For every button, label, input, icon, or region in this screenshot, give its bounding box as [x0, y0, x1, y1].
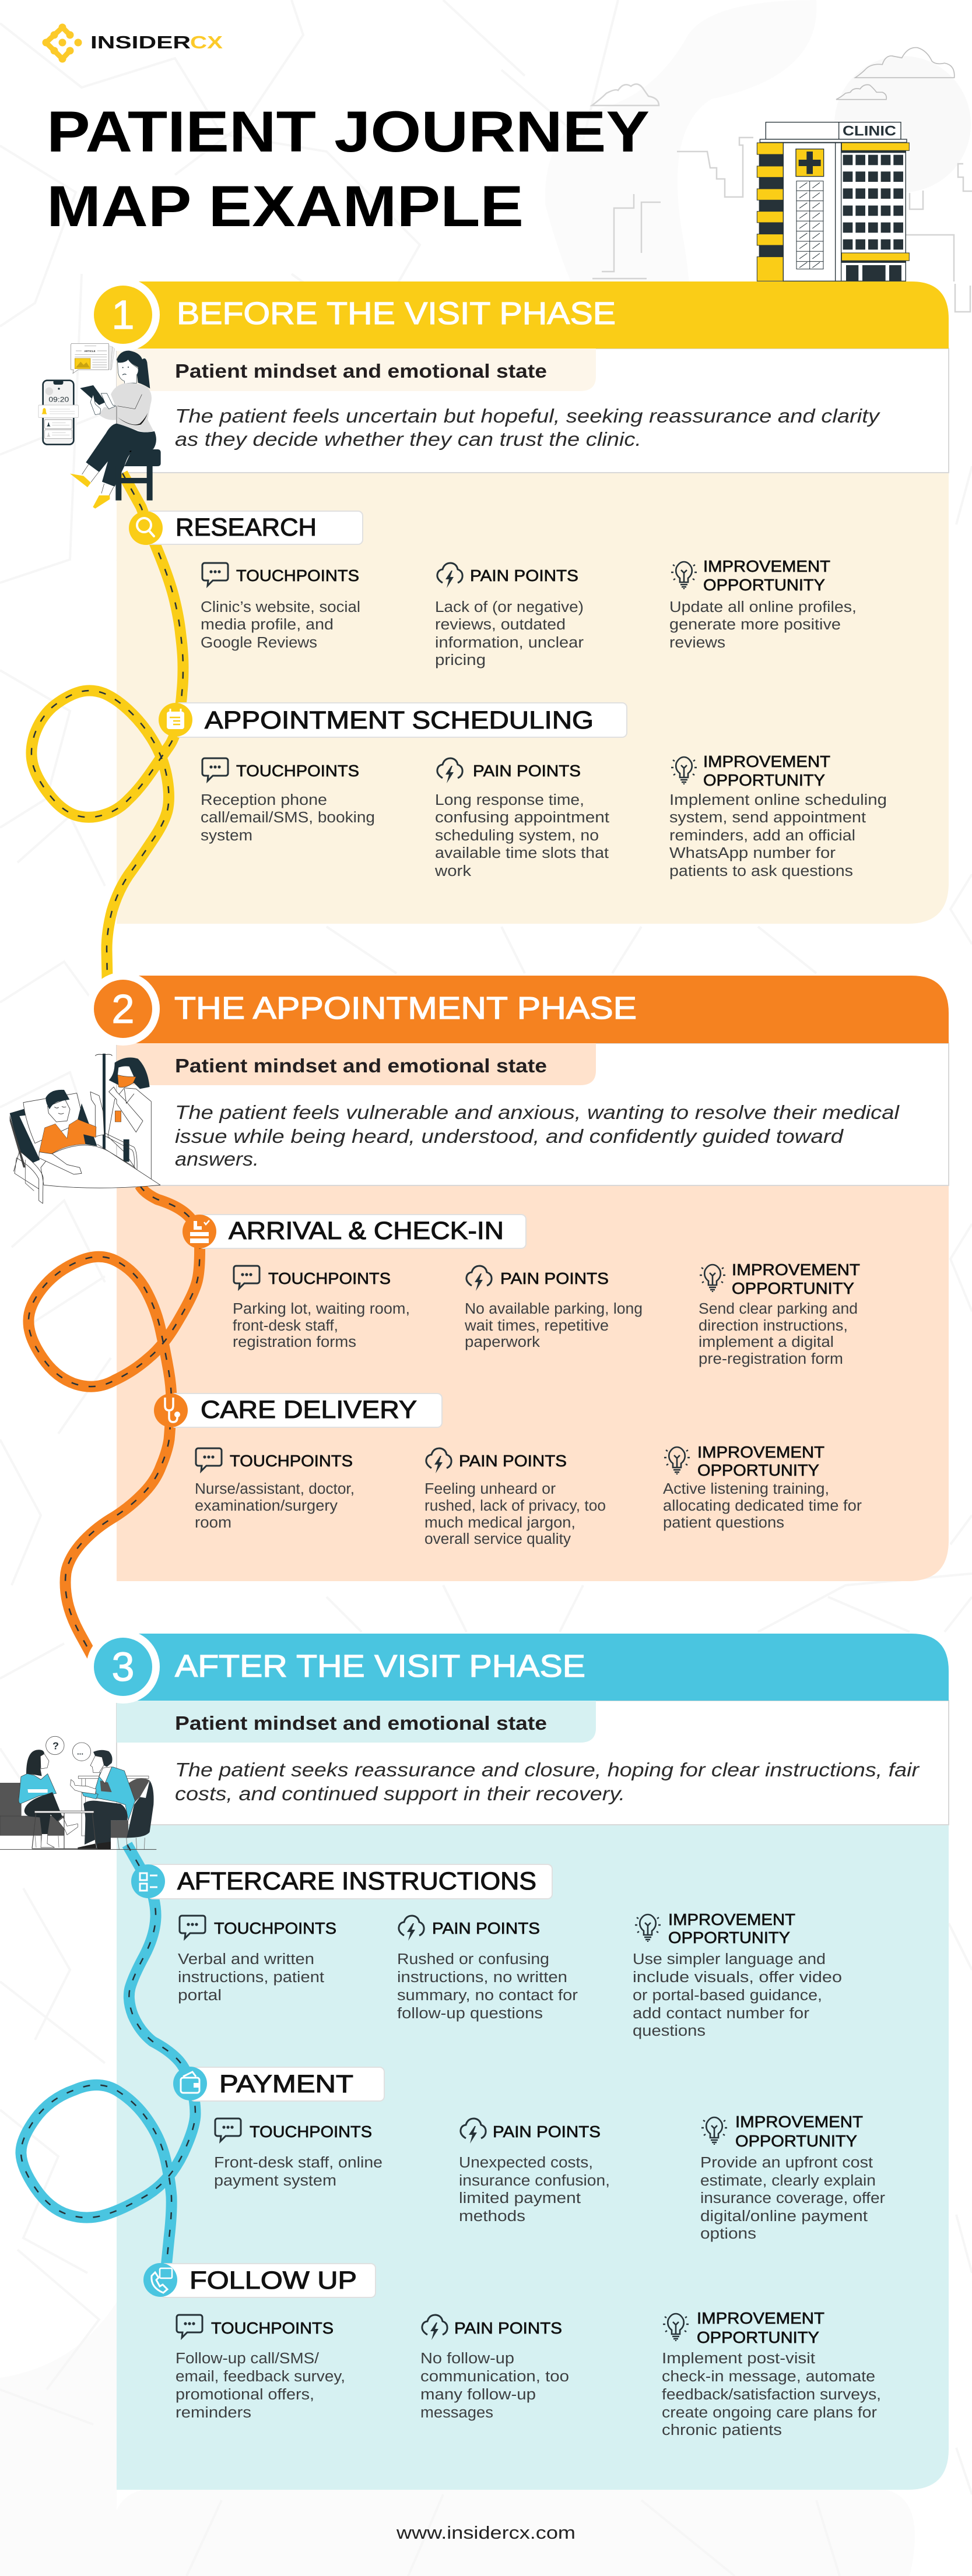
improvement opportunity: reviews [669, 635, 725, 651]
pain points: work [434, 863, 471, 879]
touchpoints: Google Reviews [201, 635, 317, 651]
mindset box [117, 1701, 949, 1825]
touchpoints: Parking lot, waiting room, [233, 1301, 410, 1317]
improvement opportunity: generate more positive [669, 617, 841, 633]
pain points: confusing appointment [435, 810, 609, 826]
step: aftercare instructions [131, 1864, 552, 1899]
touchpoints [201, 563, 360, 651]
phase title: AFTER THE VISIT PHASE [175, 1649, 585, 1684]
illustration: woman with tablet, phone and article: 09:20 [48, 396, 69, 403]
pain points: Feeling unheard or [424, 1481, 556, 1497]
mindset text [175, 1759, 920, 1804]
pain points: communication, too [420, 2369, 569, 2385]
improvement opportunity: IMPROVEMENT [697, 1443, 824, 1461]
phase title: THE APPOINTMENT PHASE [174, 991, 637, 1026]
logo [42, 23, 223, 63]
phase header [123, 281, 949, 349]
improvement opportunity: IMPROVEMENT [732, 1261, 860, 1279]
touchpoints: payment system [214, 2173, 336, 2189]
mindset text: The patient seeks reassurance and closure, hoping for clear instructions, fair [175, 1759, 920, 1780]
improvement opportunity: Active listening training, [663, 1481, 829, 1497]
step: arrival and check-in [183, 1215, 526, 1248]
pain points: rushed, lack of privacy, too [424, 1498, 606, 1514]
arrival columns [233, 1261, 860, 1367]
panel: after the visit phase [0, 1630, 949, 2490]
improvement opportunity: create ongoing care plans for [662, 2405, 878, 2421]
improvement opportunity: check-in message, automate [662, 2369, 875, 2385]
panel: the appointment phase [10, 972, 949, 1658]
mindset heading: Patient mindset and emotional state [175, 1055, 547, 1076]
improvement opportunity: patients to ask questions [669, 863, 853, 879]
improvement opportunity: pre-registration form [699, 1351, 843, 1367]
touchpoints: TOUCHPOINTS [236, 566, 359, 585]
title [47, 99, 650, 238]
improvement opportunity: direction instructions, [699, 1318, 848, 1334]
touchpoints: promotional offers, [176, 2387, 314, 2403]
improvement opportunity: OPPORTUNITY [668, 1929, 790, 1947]
pain points: available time slots that [435, 845, 609, 861]
phase header [123, 976, 949, 1043]
phase header [123, 1634, 949, 1701]
illustration: patient and doctor talking [0, 1736, 156, 1849]
improvement opportunity: IMPROVEMENT [703, 752, 830, 770]
pain points: information, unclear [435, 635, 584, 651]
improvement opportunity: implement a digital [699, 1334, 834, 1350]
touchpoints: email, feedback survey, [176, 2369, 345, 2385]
mindset text: issue while being heard, understood, and confidently guided toward [175, 1125, 844, 1147]
touchpoints: Follow-up call/SMS/ [176, 2350, 320, 2367]
pain points: reviews, outdated [435, 617, 566, 633]
improvement opportunity [700, 2113, 886, 2242]
improvement opportunity: OPPORTUNITY [697, 1461, 819, 1479]
payment columns [214, 2113, 886, 2242]
mindset text: answers. [175, 1148, 259, 1170]
touchpoints: Reception phone [201, 792, 327, 808]
touchpoints: TOUCHPOINTS [211, 2319, 334, 2337]
improvement opportunity: digital/online payment [700, 2208, 868, 2225]
footer url: www.insidercx.com [396, 2522, 576, 2543]
improvement opportunity: Update all online profiles, [669, 599, 857, 615]
illustration: woman with tablet, phone and article [38, 343, 161, 509]
panel body [117, 1825, 949, 2490]
pain points: overall service quality [424, 1531, 571, 1547]
journey road: orange [29, 1185, 200, 1658]
touchpoints: portal [178, 1987, 222, 2004]
illustration: patient and doctor talking: ... [77, 1748, 83, 1757]
pain points: No follow-up [420, 2350, 514, 2367]
improvement opportunity: patient questions [663, 1515, 784, 1531]
research columns [201, 557, 857, 668]
pain points [424, 1448, 606, 1547]
logo: CX [190, 32, 223, 52]
clinic building illustration [757, 48, 955, 281]
pain points: insurance confusion, [459, 2173, 610, 2189]
pain points: scheduling system, no [435, 828, 599, 844]
care delivery columns [195, 1443, 862, 1547]
improvement opportunity: include visuals, offer video [633, 1969, 842, 1986]
improvement opportunity: Send clear parking and [699, 1301, 858, 1317]
panel body [117, 473, 949, 924]
mindset tab [117, 1043, 596, 1085]
improvement opportunity: reminders, add an official [669, 828, 855, 844]
step: follow up [143, 2263, 376, 2297]
aftercare columns [178, 1910, 842, 2039]
pain points: follow-up questions [397, 2005, 543, 2022]
touchpoints: Front-desk staff, online [214, 2155, 383, 2171]
touchpoints: examination/surgery [195, 1498, 338, 1514]
step: care delivery [154, 1393, 442, 1427]
improvement opportunity: or portal-based guidance, [633, 1987, 822, 2004]
title: MAP EXAMPLE [47, 174, 524, 238]
touchpoints: reminders [176, 2405, 251, 2421]
step: payment [173, 2067, 384, 2101]
pain points: No available parking, long [465, 1301, 643, 1317]
improvement opportunity: insurance coverage, offer [700, 2190, 886, 2207]
pain points [420, 2315, 569, 2421]
appointment scheduling columns [201, 752, 887, 879]
logo: INSIDER [90, 32, 191, 52]
pain points: wait times, repetitive [464, 1318, 609, 1334]
improvement opportunity: OPPORTUNITY [703, 771, 825, 789]
illustration: patient and doctor talking: ? [52, 1740, 59, 1751]
illustration: patient in bed with nurse [10, 1054, 160, 1203]
mindset heading: Patient mindset and emotional state [175, 360, 547, 382]
number badge: 3 [112, 1644, 134, 1690]
pain points: Unexpected costs, [459, 2155, 593, 2171]
improvement opportunity: allocating dedicated time for [663, 1498, 862, 1514]
improvement opportunity [662, 2309, 881, 2438]
improvement opportunity [663, 1443, 862, 1531]
pain points: methods [459, 2208, 525, 2225]
skyline outlines and clouds [592, 84, 972, 312]
improvement opportunity [669, 752, 887, 879]
improvement opportunity: OPPORTUNITY [697, 2328, 819, 2346]
touchpoints: call/email/SMS, booking [201, 810, 375, 826]
pain points [434, 758, 609, 879]
phase title: BEFORE THE VISIT PHASE [177, 296, 616, 331]
illustration: woman with tablet, phone and article: ARTICLE [84, 350, 96, 353]
touchpoints: Nurse/assistant, doctor, [195, 1481, 355, 1497]
improvement opportunity [699, 1261, 860, 1367]
improvement opportunity: WhatsApp number for [669, 845, 836, 861]
pain points: limited payment [459, 2190, 581, 2207]
step: appointment scheduling [159, 703, 627, 737]
touchpoints: system [201, 828, 252, 844]
mindset tab [117, 1701, 596, 1743]
touchpoints: registration forms [233, 1334, 356, 1350]
improvement opportunity: questions [633, 2023, 706, 2039]
pain points: PAIN POINTS [454, 2319, 562, 2337]
pain points: PAIN POINTS [470, 566, 578, 585]
pain points [464, 1266, 643, 1350]
step: aftercare instructions: AFTERCARE INSTRUCTIONS [177, 1867, 536, 1895]
mindset heading: Patient mindset and emotional state [175, 1712, 547, 1734]
touchpoints [195, 1448, 355, 1531]
improvement opportunity [633, 1910, 842, 2039]
improvement opportunity: OPPORTUNITY [703, 576, 825, 594]
improvement opportunity: feedback/satisfaction surveys, [662, 2387, 881, 2403]
pain points: many follow-up [420, 2387, 536, 2403]
mindset text: as they decide whether they can trust the clinic. [175, 428, 641, 450]
pain points: Lack of (or negative) [435, 599, 584, 615]
mindset box [117, 349, 949, 473]
step: payment: PAYMENT [219, 2070, 353, 2098]
number badge: 1 [112, 292, 134, 337]
pain points: paperwork [465, 1334, 540, 1350]
improvement opportunity: OPPORTUNITY [732, 1279, 854, 1297]
pain points: summary, no contact for [397, 1987, 578, 2004]
mindset text: costs, and continued support in their recovery. [175, 1783, 625, 1804]
step: care delivery: CARE DELIVERY [201, 1396, 417, 1424]
number badge [86, 1630, 160, 1704]
touchpoints: TOUCHPOINTS [230, 1452, 353, 1470]
pain points: instructions, no written [397, 1969, 567, 1986]
touchpoints: front-desk staff, [233, 1318, 338, 1334]
step: research [129, 511, 363, 545]
pain points [459, 2118, 610, 2225]
improvement opportunity: IMPROVEMENT [703, 557, 830, 575]
step: arrival and check-in: ARRIVAL & CHECK-IN [229, 1217, 504, 1245]
follow up columns [176, 2309, 881, 2438]
mindset box [117, 1043, 949, 1185]
pain points: messages [420, 2405, 493, 2421]
touchpoints: Verbal and written [178, 1951, 314, 1968]
mindset text: The patient feels uncertain but hopeful, seeking reassurance and clarity [175, 405, 881, 427]
panel body [117, 1185, 949, 1581]
mindset text [175, 1102, 900, 1170]
touchpoints [201, 758, 375, 844]
pain points [435, 563, 584, 668]
improvement opportunity: system, send appointment [669, 810, 866, 826]
touchpoints: TOUCHPOINTS [268, 1269, 391, 1287]
step: appointment scheduling: APPOINTMENT SCHEDULING [205, 706, 594, 734]
improvement opportunity: chronic patients [662, 2422, 782, 2438]
improvement opportunity [669, 557, 857, 651]
pain points [397, 1916, 578, 2022]
clinic building illustration: CLINIC [843, 123, 896, 139]
touchpoints: TOUCHPOINTS [214, 1919, 336, 1937]
touchpoints [176, 2315, 345, 2421]
improvement opportunity: IMPROVEMENT [735, 2113, 863, 2131]
pain points: pricing [435, 652, 486, 668]
improvement opportunity: Implement online scheduling [669, 792, 887, 808]
pain points: PAIN POINTS [493, 2123, 601, 2141]
touchpoints: media profile, and [201, 617, 334, 633]
improvement opportunity: Use simpler language and [633, 1951, 826, 1968]
improvement opportunity: estimate, clearly explain [700, 2173, 876, 2189]
number badge: 2 [112, 986, 134, 1032]
touchpoints: TOUCHPOINTS [250, 2123, 372, 2141]
pain points: PAIN POINTS [500, 1269, 609, 1287]
pain points: Rushed or confusing [397, 1951, 549, 1968]
journey road: yellow [31, 473, 183, 979]
touchpoints: instructions, patient [178, 1969, 324, 1986]
panel: before the visit phase [31, 278, 949, 979]
improvement opportunity: add contact number for [633, 2005, 810, 2022]
number badge [86, 972, 160, 1046]
mindset text: The patient feels vulnerable and anxious, wanting to resolve their medical [175, 1102, 900, 1123]
step: research: RESEARCH [176, 513, 317, 541]
step: follow up: FOLLOW UP [190, 2267, 357, 2295]
touchpoints: room [195, 1515, 231, 1531]
improvement opportunity: Provide an upfront cost [700, 2155, 873, 2171]
improvement opportunity: IMPROVEMENT [697, 2309, 824, 2327]
pain points: PAIN POINTS [432, 1919, 540, 1937]
mindset tab [117, 349, 596, 391]
number badge [86, 278, 160, 351]
pain points: much medical jargon, [424, 1515, 576, 1531]
pain points: PAIN POINTS [473, 762, 581, 780]
touchpoints: TOUCHPOINTS [236, 762, 359, 780]
journey road: blue [21, 1845, 195, 2267]
improvement opportunity: IMPROVEMENT [668, 1910, 795, 1929]
improvement opportunity: options [700, 2226, 756, 2242]
mindset text [175, 405, 881, 450]
pain points: PAIN POINTS [459, 1452, 567, 1470]
pain points: Long response time, [435, 792, 584, 808]
touchpoints [214, 2118, 383, 2189]
touchpoints: Clinic’s website, social [201, 599, 360, 615]
touchpoints [233, 1266, 410, 1350]
improvement opportunity: OPPORTUNITY [735, 2132, 857, 2150]
touchpoints [178, 1916, 336, 2004]
improvement opportunity: Implement post-visit [662, 2350, 815, 2367]
title: PATIENT JOURNEY [47, 99, 650, 164]
